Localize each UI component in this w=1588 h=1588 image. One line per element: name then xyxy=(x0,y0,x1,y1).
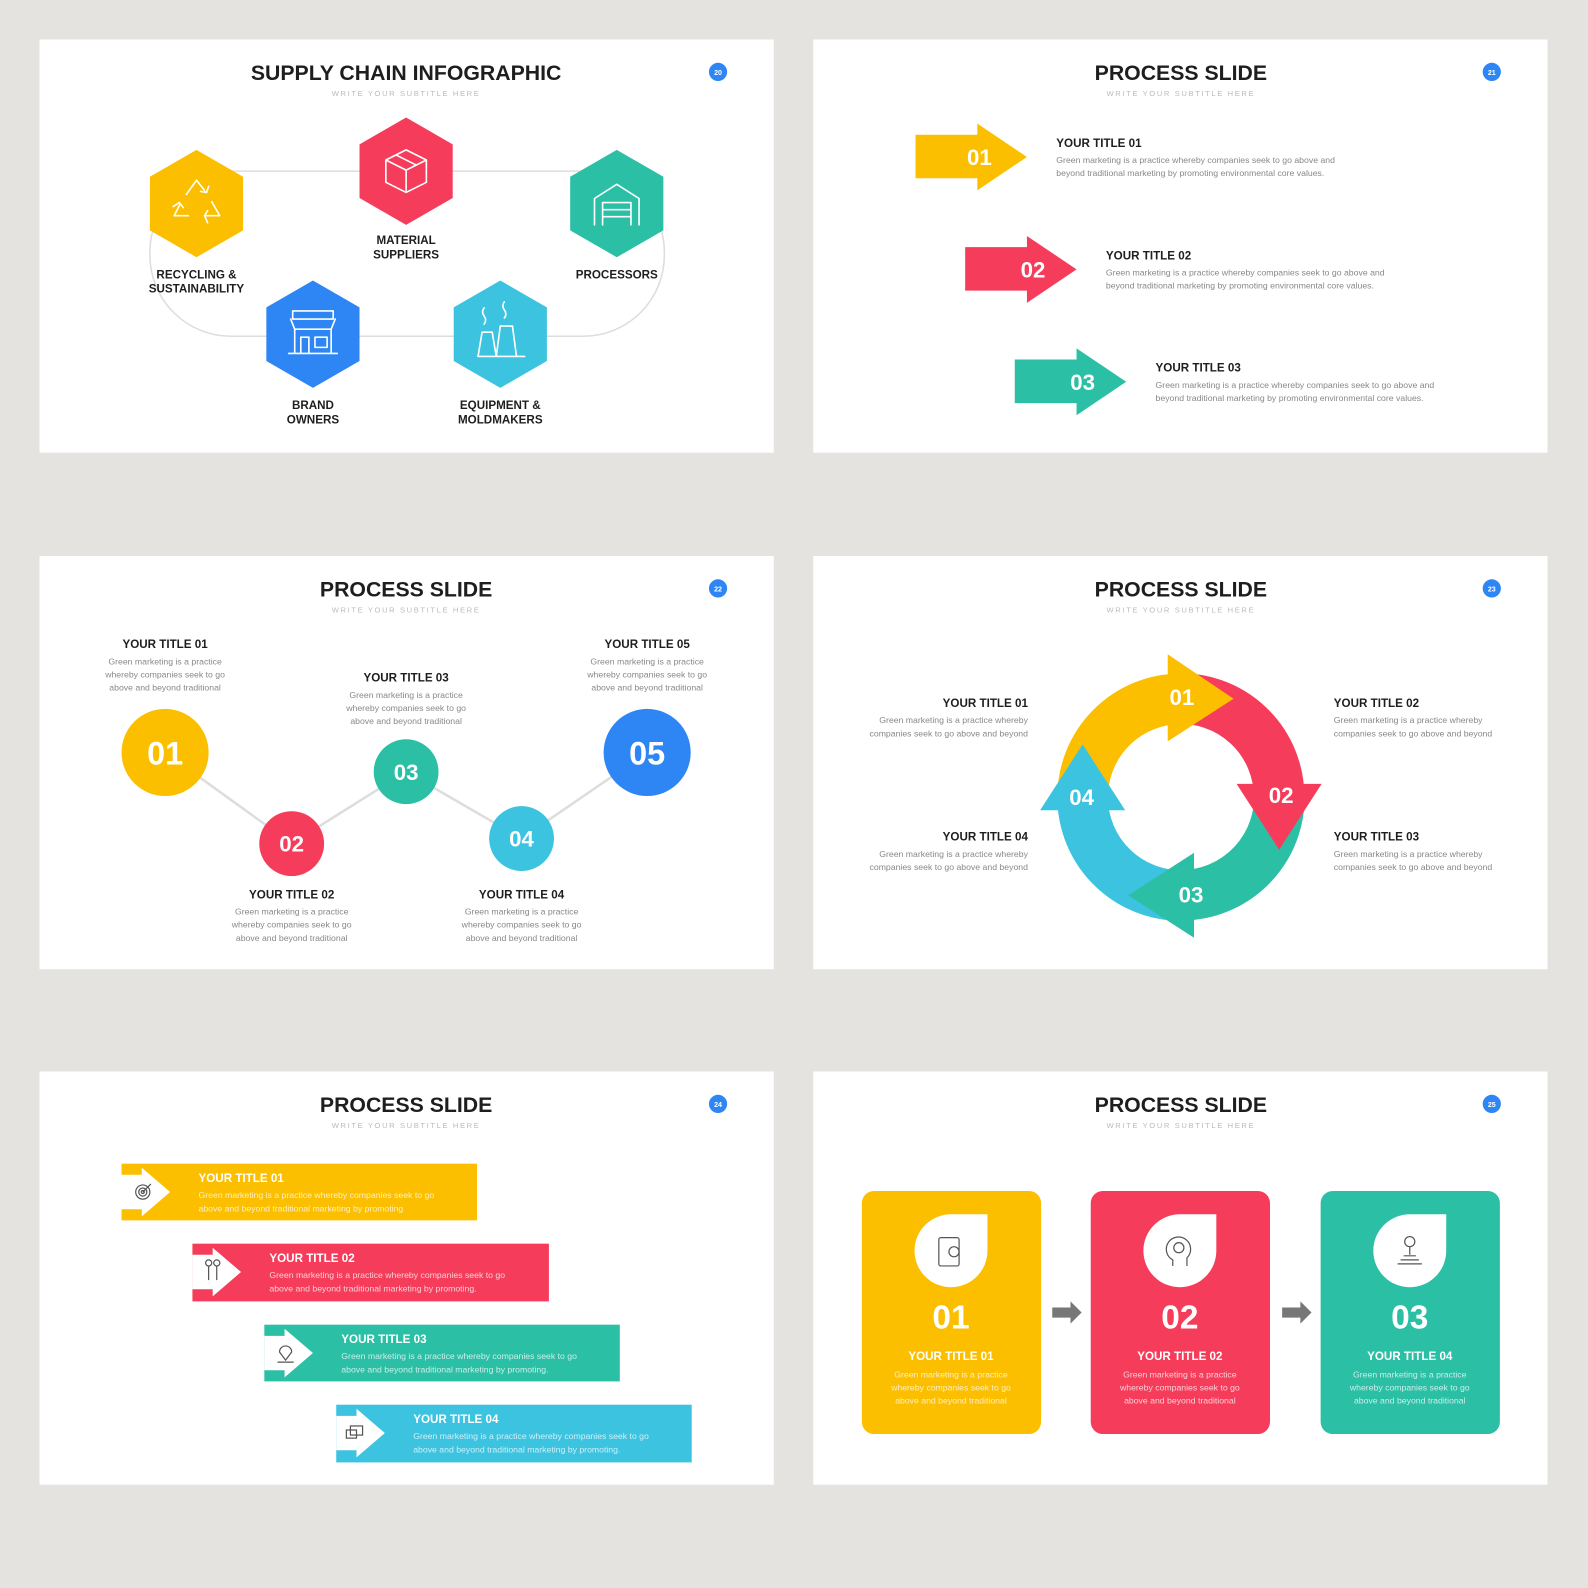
card 02 xyxy=(1091,1191,1270,1434)
arrow 01: beyond traditional marketing by promoting environmental core values. xyxy=(1056,168,1324,178)
banner 04: YOUR TITLE 04 xyxy=(413,1413,499,1426)
text 02: YOUR TITLE 02 xyxy=(1334,697,1419,710)
title: PROCESS SLIDE xyxy=(320,578,492,602)
subtitle: WRITE YOUR SUBTITLE HERE xyxy=(1107,606,1255,615)
arrow 03: YOUR TITLE 03 xyxy=(1156,362,1241,375)
banner 04: Green marketing is a practice whereby companies seek to go xyxy=(413,1431,649,1441)
card 03: YOUR TITLE 04 xyxy=(1367,1350,1453,1363)
step 01: YOUR TITLE 01 xyxy=(122,638,208,651)
card 01: whereby companies seek to go xyxy=(890,1383,1011,1393)
card 03: Green marketing is a practice xyxy=(1353,1369,1467,1379)
arrow 03: 03 xyxy=(1070,370,1095,395)
banner 03 xyxy=(264,1325,620,1381)
arrow 03: Green marketing is a practice whereby companies seek to go above and xyxy=(1156,380,1434,390)
badge: 23 xyxy=(1488,585,1496,593)
panel: banners xyxy=(39,1071,774,1485)
card 01: YOUR TITLE 01 xyxy=(908,1350,994,1363)
cycle diagram: 04 xyxy=(1069,785,1095,810)
subtitle: WRITE YOUR SUBTITLE HERE xyxy=(1107,89,1255,98)
cycle diagram: 03 xyxy=(1179,882,1203,907)
card 03 xyxy=(1321,1191,1500,1434)
hexagon: material suppliers: SUPPLIERS xyxy=(373,248,439,261)
banner 02: Green marketing is a practice whereby companies seek to go xyxy=(269,1270,505,1280)
banner 02: YOUR TITLE 02 xyxy=(269,1252,355,1265)
step 04: 04 xyxy=(509,827,535,852)
card 01: above and beyond traditional xyxy=(895,1396,1007,1406)
title: SUPPLY CHAIN INFOGRAPHIC xyxy=(251,61,561,85)
hexagon: brand owners xyxy=(266,281,360,426)
arrow 02: YOUR TITLE 02 xyxy=(1106,249,1191,262)
step 05: YOUR TITLE 05 xyxy=(605,638,690,651)
step 03: 03 xyxy=(394,760,419,785)
title: PROCESS SLIDE xyxy=(1095,1093,1267,1117)
arrow 02 xyxy=(965,236,1385,303)
panel: zigzag circles xyxy=(39,556,774,969)
hexagon: equipment: MOLDMAKERS xyxy=(458,413,543,426)
text 03: YOUR TITLE 03 xyxy=(1334,831,1420,844)
card 02: above and beyond traditional xyxy=(1124,1396,1236,1406)
text 02 xyxy=(1334,697,1492,738)
card 03: whereby companies seek to go xyxy=(1349,1383,1470,1393)
banner 01: Green marketing is a practice whereby companies seek to go xyxy=(198,1190,434,1200)
badge xyxy=(1483,579,1501,598)
card 02: 02 xyxy=(1161,1300,1198,1337)
step 01: Green marketing is a practice xyxy=(108,656,222,666)
text 03 xyxy=(1334,831,1492,872)
step 02 xyxy=(231,811,352,943)
badge xyxy=(1483,1095,1501,1113)
text 03: companies seek to go above and beyond xyxy=(1334,862,1492,872)
step 03: whereby companies seek to go xyxy=(345,703,466,713)
hexagon: brand owners: OWNERS xyxy=(287,413,339,426)
step 03: Green marketing is a practice xyxy=(349,690,463,700)
badge: 24 xyxy=(714,1101,722,1109)
subtitle: WRITE YOUR SUBTITLE HERE xyxy=(332,89,480,98)
text 03: Green marketing is a practice whereby xyxy=(1334,849,1483,859)
step 03 xyxy=(345,672,466,804)
card 03: above and beyond traditional xyxy=(1354,1396,1466,1406)
panel: arrows process xyxy=(813,39,1547,453)
hexagon: processors: PROCESSORS xyxy=(576,269,658,282)
hexagon: material suppliers xyxy=(360,117,453,261)
badge xyxy=(709,1095,727,1113)
hexagon: recycling: RECYCLING & xyxy=(156,269,237,282)
text 01 xyxy=(870,697,1029,738)
step 02: YOUR TITLE 02 xyxy=(249,888,334,901)
hexagon: equipment xyxy=(454,281,547,426)
step 03: YOUR TITLE 03 xyxy=(363,672,449,685)
step 01: 01 xyxy=(147,736,183,772)
step 04 xyxy=(461,806,582,943)
badge: 21 xyxy=(1488,69,1496,77)
text 04: YOUR TITLE 04 xyxy=(943,831,1028,844)
arrow 02: Green marketing is a practice whereby companies seek to go above and xyxy=(1106,267,1385,277)
step 02: Green marketing is a practice xyxy=(235,907,349,917)
cycle diagram: 01 xyxy=(1169,685,1194,710)
text 01: YOUR TITLE 01 xyxy=(943,697,1028,710)
text 02: Green marketing is a practice whereby xyxy=(1334,715,1483,725)
badge xyxy=(1483,63,1501,81)
arrow 01: Green marketing is a practice whereby companies seek to go above and xyxy=(1056,155,1335,165)
step 04: YOUR TITLE 04 xyxy=(479,888,565,901)
badge xyxy=(709,579,727,598)
text 02: companies seek to go above and beyond xyxy=(1334,728,1492,738)
arrow 01 xyxy=(916,124,1335,190)
arrow 1 xyxy=(1052,1301,1082,1324)
arrow 02: beyond traditional marketing by promoting environmental core values. xyxy=(1106,281,1374,291)
step 01 xyxy=(104,638,225,796)
text 01: companies seek to go above and beyond xyxy=(870,728,1028,738)
banner 03: Green marketing is a practice whereby companies seek to go xyxy=(341,1351,577,1361)
step 02: whereby companies seek to go xyxy=(231,920,352,930)
title: PROCESS SLIDE xyxy=(320,1093,492,1117)
step 05: above and beyond traditional xyxy=(591,683,703,693)
arrow 2 xyxy=(1282,1301,1312,1324)
hexagon: recycling: SUSTAINABILITY xyxy=(149,283,244,296)
title: PROCESS SLIDE xyxy=(1095,61,1267,85)
step 04: whereby companies seek to go xyxy=(461,920,582,930)
badge: 22 xyxy=(714,585,722,593)
card 01: 01 xyxy=(932,1300,970,1337)
card 01 xyxy=(862,1191,1041,1434)
arrow 02: 02 xyxy=(1021,257,1045,282)
step 02: above and beyond traditional xyxy=(236,933,348,943)
arrow 01: YOUR TITLE 01 xyxy=(1056,137,1142,150)
loop connector xyxy=(150,171,664,336)
step 05: whereby companies seek to go xyxy=(586,670,707,680)
panel: cards xyxy=(813,1071,1547,1485)
text 04: companies seek to go above and beyond xyxy=(870,862,1028,872)
arrow 01: 01 xyxy=(967,145,992,170)
banner 02 xyxy=(192,1244,549,1301)
banner 04 xyxy=(336,1405,692,1462)
banner 03: above and beyond traditional marketing by promoting. xyxy=(341,1364,548,1374)
cycle diagram xyxy=(1040,654,1322,938)
card 02: Green marketing is a practice xyxy=(1123,1369,1237,1379)
step 01: above and beyond traditional xyxy=(109,683,221,693)
panel: cycle xyxy=(813,556,1547,969)
step 02: 02 xyxy=(279,832,304,857)
text 04: Green marketing is a practice whereby xyxy=(879,849,1029,859)
step 03: above and beyond traditional xyxy=(350,716,462,726)
step 05 xyxy=(586,638,707,796)
banner 01: above and beyond traditional marketing by promoting xyxy=(198,1203,403,1213)
badge: 20 xyxy=(714,69,722,77)
banner 03: YOUR TITLE 03 xyxy=(341,1333,427,1346)
banner 01 xyxy=(122,1164,477,1220)
badge xyxy=(709,63,727,81)
panel: supply chain xyxy=(39,39,774,453)
banner 02: above and beyond traditional marketing by promoting. xyxy=(269,1283,477,1293)
arrow 03 xyxy=(1015,348,1434,415)
card 02: YOUR TITLE 02 xyxy=(1137,1350,1222,1363)
hexagon: brand owners: BRAND xyxy=(292,399,334,412)
text 01: Green marketing is a practice whereby xyxy=(879,715,1029,725)
arrow 03: beyond traditional marketing by promoting environmental core values. xyxy=(1156,393,1424,403)
hexagon: material suppliers: MATERIAL xyxy=(377,234,436,247)
card 03: 03 xyxy=(1391,1300,1428,1337)
subtitle: WRITE YOUR SUBTITLE HERE xyxy=(1107,1121,1255,1130)
step 04: above and beyond traditional xyxy=(466,933,577,943)
banner 01: YOUR TITLE 01 xyxy=(198,1172,284,1185)
card 01: Green marketing is a practice xyxy=(894,1369,1008,1379)
text 04 xyxy=(870,831,1029,872)
badge: 25 xyxy=(1488,1101,1496,1109)
hexagon: processors xyxy=(570,150,663,282)
banner 04: above and beyond traditional marketing by promoting. xyxy=(413,1444,620,1454)
step 05: Green marketing is a practice xyxy=(590,656,704,666)
step 01: whereby companies seek to go xyxy=(104,670,225,680)
cycle diagram: 02 xyxy=(1269,783,1294,808)
hexagon: recycling xyxy=(149,150,244,296)
card 02: whereby companies seek to go xyxy=(1119,1383,1240,1393)
step 05: 05 xyxy=(629,736,665,772)
step 04: Green marketing is a practice xyxy=(465,907,578,917)
subtitle: WRITE YOUR SUBTITLE HERE xyxy=(332,1121,480,1130)
hexagon: equipment: EQUIPMENT & xyxy=(460,399,541,412)
title: PROCESS SLIDE xyxy=(1095,578,1267,602)
subtitle: WRITE YOUR SUBTITLE HERE xyxy=(332,606,480,615)
